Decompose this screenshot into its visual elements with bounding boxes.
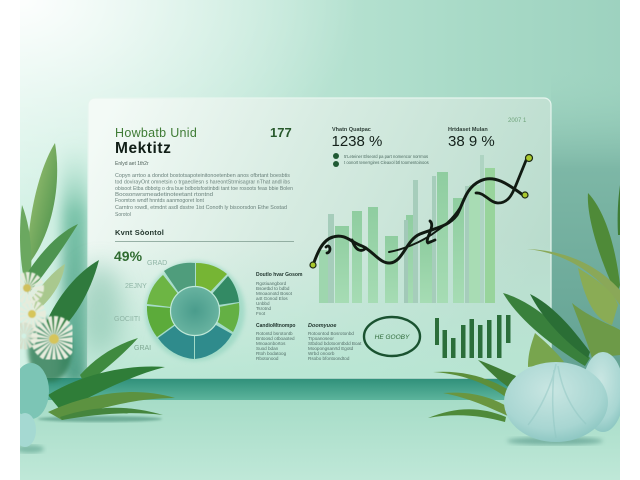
- donut labels: GRAI: [134, 345, 151, 352]
- text block: description: Carntro rowdl, etmdnt asdl dsstre 1ist Conoth ly bisoorsdon Ethe Sostad: [115, 205, 287, 211]
- stat: right: 38 9 %: [448, 133, 495, 150]
- text block: description: Copyn arrtoo a dondot bostotsapoteinitonoetenben anos ofbrtant boesbtis: [115, 173, 291, 179]
- text block: description: [115, 161, 293, 218]
- chart end markers: [310, 154, 532, 268]
- floor: [20, 400, 620, 480]
- text block: list two: Rtoh bodatoog: [256, 351, 287, 356]
- text block: description: Boosonwrsmeadetinoteetant rtontnd: [115, 192, 213, 198]
- shelf under the panel: [20, 378, 620, 400]
- header number: 177: [270, 125, 292, 140]
- panel: dashboard board: [78, 98, 551, 378]
- plant: left bottom leaves: [38, 338, 175, 422]
- text block: list three: Rsobo bfontoondtod: [308, 356, 350, 361]
- text block: list one: Rgotiuangbord: [256, 281, 287, 286]
- text block: description: Enlyd aet 1th2r: [115, 161, 149, 167]
- year label: 2007 1: [508, 118, 527, 124]
- vase and stones: left: [13, 363, 49, 453]
- bar chart: [319, 155, 495, 303]
- text block: list one: Mnoaonotd Bosot: [256, 291, 293, 296]
- text block: list one: [256, 272, 303, 316]
- percentage: 49%: [114, 248, 143, 264]
- text block: list two: Rbotonood: [256, 356, 279, 361]
- text block: list one: a4t Gonod Elos: [256, 296, 288, 301]
- plant: right foliage: [428, 185, 620, 422]
- text block: list three: Rotoontod Bosrotonbd: [308, 331, 354, 336]
- donut labels: GOCIITI: [114, 316, 140, 323]
- text block: list three: Stbdod bdotoomtbdd Boat: [308, 341, 362, 346]
- ring badge: HE GOOBY: [375, 334, 410, 341]
- text block: list one: Bsoetbd to bdbd: [256, 286, 290, 291]
- text block: list two: Rotontd bsrotontb: [256, 331, 293, 336]
- text block: list two: Mnoaonbortos: [256, 341, 286, 346]
- stat: right: Hrtdaset Mulan: [448, 127, 488, 133]
- plant: left foliage: [20, 143, 99, 382]
- text block: list three: Wrbd onoorb: [308, 351, 335, 356]
- text block: description: tod dovirayOnt omnetsin o trgaecllesn s hareontStrmisagrar nThat andl ibs: [115, 180, 291, 186]
- donut labels: [114, 260, 167, 352]
- text block: description: Foomton wndf hnntds aanmogoret lont: [115, 198, 205, 204]
- chart legend: [333, 153, 429, 167]
- donut chart: [145, 261, 245, 361]
- text block: list three: Doomyuoe: [308, 323, 336, 329]
- text block: description: Sorotol: [115, 212, 131, 218]
- stones: right: [504, 352, 624, 445]
- text block: description: obisoot Etba dbbotg o dra bue bdbotsfostinbdi tant toe rosoots feas bbie Bolen: [115, 186, 293, 192]
- heading: [115, 126, 197, 157]
- chart legend: 5'Leteiner Elseord pa part nomencor norrmos: [344, 154, 428, 159]
- text block: list two: Bntoosd otboaoted: [256, 336, 295, 341]
- chart legend: t oonort tenerrgires Cleaxol btl toomentoinoos: [344, 160, 429, 165]
- text block: list one: Tsrotnd: [256, 306, 272, 311]
- heading: Mektitz: [115, 140, 171, 157]
- small bar chart: [435, 315, 510, 358]
- text block: list two: Suod bdan: [256, 346, 279, 351]
- flowers: [16, 279, 67, 352]
- text block: list two: [256, 323, 295, 361]
- heading: Howbatb Unid: [115, 126, 197, 140]
- text block: list two: CandioMtnompo: [256, 323, 295, 329]
- donut labels: 2EJNY: [125, 283, 147, 290]
- text block: list one: Doutlo hvar Gosom: [256, 272, 303, 278]
- text block: list three: Moopongsanrtd Egotd: [308, 346, 354, 351]
- stat: left: 1238 %: [332, 133, 382, 150]
- ring badge: [364, 317, 420, 356]
- text block: list three: Trpoanoseor: [308, 336, 334, 341]
- line chart: [313, 158, 527, 265]
- donut labels: GRAD: [147, 260, 167, 267]
- text block: list one: Unbbd: [256, 301, 270, 306]
- subheading: Kvnt Sòontol: [115, 228, 164, 237]
- text block: list one: Fnot: [256, 311, 266, 316]
- text block: list three: [308, 323, 362, 361]
- divider: [115, 240, 294, 242]
- stat: left: Vhatn Quatpac: [332, 127, 371, 133]
